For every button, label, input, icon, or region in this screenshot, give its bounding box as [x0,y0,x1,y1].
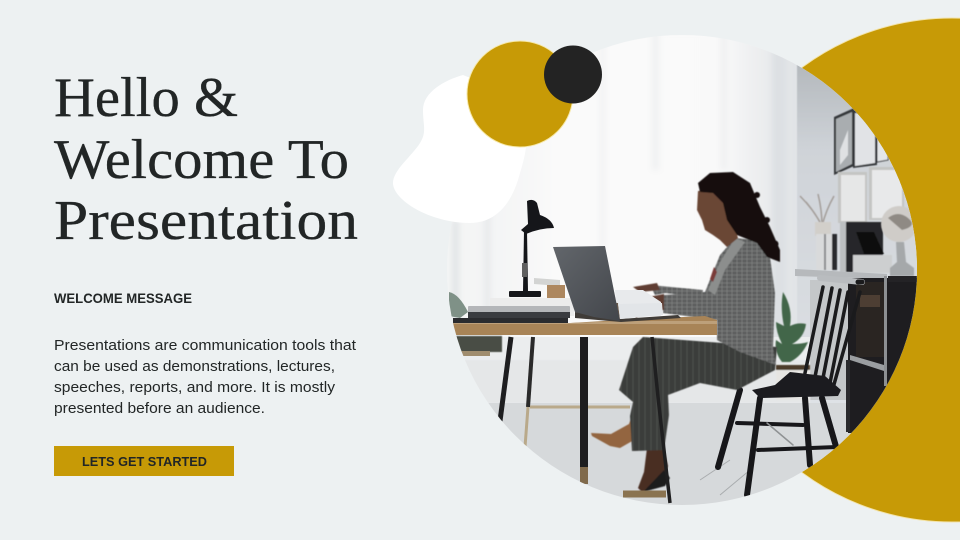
trousers [619,337,777,451]
jacket [663,238,776,365]
wall [796,65,917,429]
title: Hello & [54,67,238,129]
chair [718,278,862,495]
button: LETS GET STARTED [82,454,207,469]
body text: speeches, reports, and more. It is mostly [54,380,336,396]
gold circle [467,41,573,147]
shelf and cabinet [795,269,887,279]
laptop [615,290,661,316]
far sleeve [652,285,704,296]
body text: can be used as demonstrations, lectures, [54,359,335,375]
hands [633,283,664,320]
subheading: WELCOME MESSAGE [54,291,192,306]
books behind laptop [534,278,560,285]
vase and dried flowers [800,194,837,270]
desk legs [500,337,630,484]
notebooks on desk [490,298,574,316]
picture frames [834,108,904,223]
legs and shoes [590,420,632,449]
title: Presentation [54,190,358,252]
chair seat [752,372,841,398]
lapel [708,238,745,295]
curtains [452,50,797,337]
body text: presented before an audience. [54,401,265,417]
binders and box [840,222,892,273]
woman [591,172,780,492]
body text [54,338,356,417]
title [54,67,358,252]
dark circle [544,46,602,104]
globe [881,206,917,276]
plant [774,292,811,371]
drape and floor [464,337,810,360]
body text: Presentations are communication tools that [54,338,356,354]
radiator behind chair [810,280,848,400]
photo: woman working at a desk [440,30,927,510]
thin desk leg [652,337,670,503]
neck and face [697,188,738,247]
hair [698,172,780,262]
foot rail [623,490,666,498]
button [54,446,234,476]
gold circle background [700,18,960,522]
title: Welcome To [54,129,349,191]
lamp [509,200,554,297]
desk top [453,316,717,335]
white blob [393,75,527,223]
